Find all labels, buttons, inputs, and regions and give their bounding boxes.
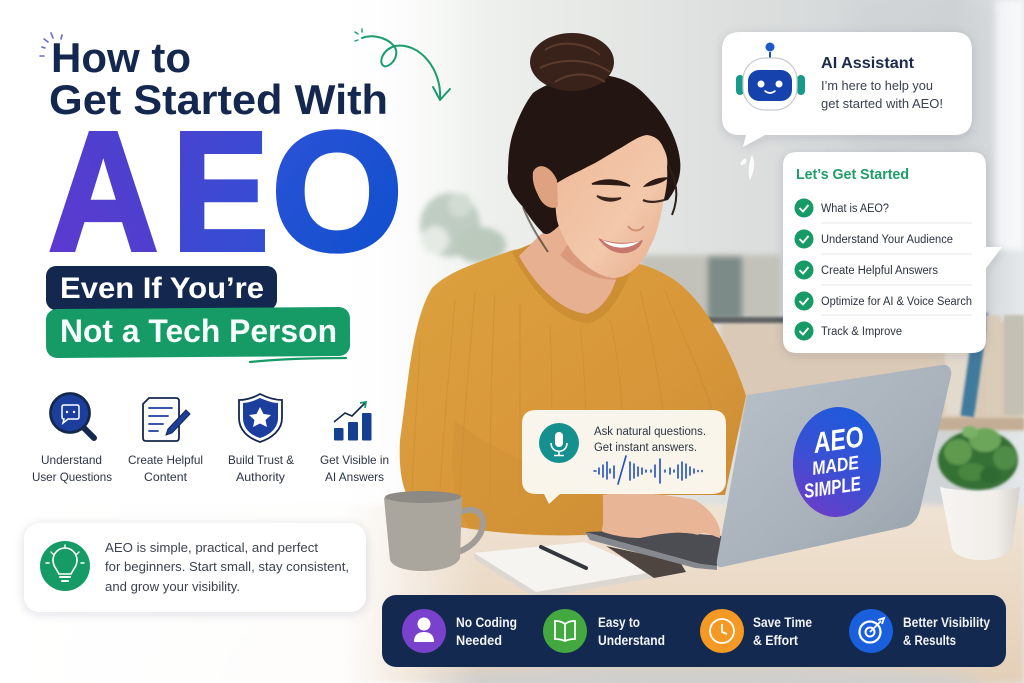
checklist item: Optimize for AI & Voice Search <box>794 292 972 310</box>
benefit: easy to understand: Easy to <box>598 615 640 630</box>
neck and chest <box>519 215 620 314</box>
potted plant <box>938 426 1020 560</box>
benefit: better visibility and results: & Results <box>903 633 956 648</box>
ear <box>533 166 558 208</box>
sweater torso and sleeves <box>400 240 746 535</box>
benefit: easy to understand: Understand <box>598 633 665 648</box>
eyebrows and eyes <box>592 180 630 186</box>
nose shadow <box>628 226 644 230</box>
benefit: save time and effort: & Effort <box>753 633 798 648</box>
decorative white leaves <box>740 155 754 180</box>
benefit: save time and effort: Save Time <box>753 615 812 630</box>
subtitle pill: Not a Tech Person <box>46 307 350 362</box>
subtitle pill: Even If You're <box>46 266 277 310</box>
icon: magnifier with chat bubble <box>50 394 94 438</box>
icon: rising bar chart <box>334 402 372 440</box>
coffee mug <box>384 491 483 571</box>
AEO Made Simple badge: AEO <box>811 421 866 460</box>
subtitle pill: Even If You're: Even If You’re <box>60 272 264 305</box>
tip text <box>105 540 349 594</box>
AEO large wordmark: E <box>172 96 269 287</box>
tip text: AEO is simple, practical, and perfect <box>105 540 318 555</box>
hair back <box>508 75 680 234</box>
benefit labels: Build Trust & <box>228 453 294 467</box>
checklist item: Track & Improve <box>794 322 902 340</box>
panel: AI assistant speech bubble: I’m here to help you <box>821 78 933 93</box>
subtitle pill: Not a Tech Person: Not a Tech Person <box>60 313 337 349</box>
photo background: room, desk and blurred props <box>355 0 1024 683</box>
panel: AI assistant speech bubble: get started with AEO! <box>821 96 943 111</box>
AEO large wordmark <box>48 96 403 287</box>
checklist item: What is AEO? <box>794 198 889 218</box>
AEO Made Simple badge <box>789 404 885 520</box>
heading: Get Started With <box>49 76 388 123</box>
benefit: no coding needed <box>402 609 517 653</box>
AEO Made Simple badge: SIMPLE <box>803 473 863 503</box>
icon: shield with star <box>239 394 282 442</box>
sparkle accents <box>40 33 62 56</box>
panel: beginner tip card <box>24 523 366 612</box>
icon: microphone <box>539 423 579 463</box>
AEO Made Simple badge: MADE <box>811 452 861 480</box>
tip text: for beginners. Start small, stay consistent, <box>105 559 349 574</box>
panel: voice search speech bubble: Get instant answers. <box>594 442 697 454</box>
checklist item: Optimize for AI & Voice Search: Optimize for AI & Voice Search <box>821 296 972 308</box>
benefit: save time and effort <box>700 609 812 653</box>
benefit labels: Create Helpful <box>128 453 203 467</box>
icon: robot <box>736 42 805 110</box>
benefit labels: AI Answers <box>325 470 384 484</box>
icon: light bulb <box>40 541 90 591</box>
checklist item: Track & Improve: Track & Improve <box>821 326 902 338</box>
benefit: easy to understand <box>543 609 665 653</box>
sweater ribbed collar <box>512 240 634 323</box>
AEO large wordmark: A <box>48 98 158 287</box>
benefit labels: Get Visible in <box>320 453 389 467</box>
woman at laptop <box>400 33 746 536</box>
benefit labels: Authority <box>236 470 285 484</box>
heading: How to <box>51 34 191 81</box>
benefit labels <box>32 453 389 484</box>
panel: bottom benefits bar <box>382 595 1006 667</box>
tip text: and grow your visibility. <box>105 579 240 594</box>
icon: document with pencil <box>143 398 190 441</box>
panel: Let's Get Started checklist <box>783 152 1002 353</box>
phone <box>606 546 686 578</box>
benefit: better visibility and results: Better Visibility <box>903 615 990 630</box>
benefit: no coding needed: No Coding <box>456 615 517 630</box>
panel: Let's Get Started checklist: Let’s Get Started <box>796 167 909 183</box>
hair bun <box>530 33 614 91</box>
panel: voice search speech bubble <box>522 410 726 504</box>
face <box>556 135 667 278</box>
checklist item: Create Helpful Answers: Create Helpful Answers <box>821 265 938 277</box>
checklist item: What is AEO?: What is AEO? <box>821 203 889 215</box>
checklist item: Understand Your Audience: Understand Your Audience <box>821 234 953 246</box>
curly green arrow <box>355 29 450 100</box>
panel: AI assistant speech bubble: AI Assistant <box>821 55 915 72</box>
benefit: better visibility and results <box>849 609 990 653</box>
benefit labels: User Questions <box>32 470 112 484</box>
checklist item: Create Helpful Answers <box>794 260 938 280</box>
benefit labels: Content <box>144 470 188 484</box>
checklist item: Understand Your Audience <box>794 230 953 248</box>
benefit: no coding needed: Needed <box>456 633 502 648</box>
laptop <box>585 365 951 570</box>
smile <box>598 238 643 253</box>
panel: voice search speech bubble: Ask natural questions. <box>594 426 706 438</box>
hand on keyboard <box>603 493 720 538</box>
panel: AI assistant speech bubble <box>722 32 972 147</box>
benefit labels: Understand <box>41 453 102 467</box>
notebook and pen <box>474 542 653 598</box>
heading <box>49 34 388 123</box>
sound waveform <box>594 456 702 484</box>
AEO large wordmark: O <box>271 97 403 287</box>
